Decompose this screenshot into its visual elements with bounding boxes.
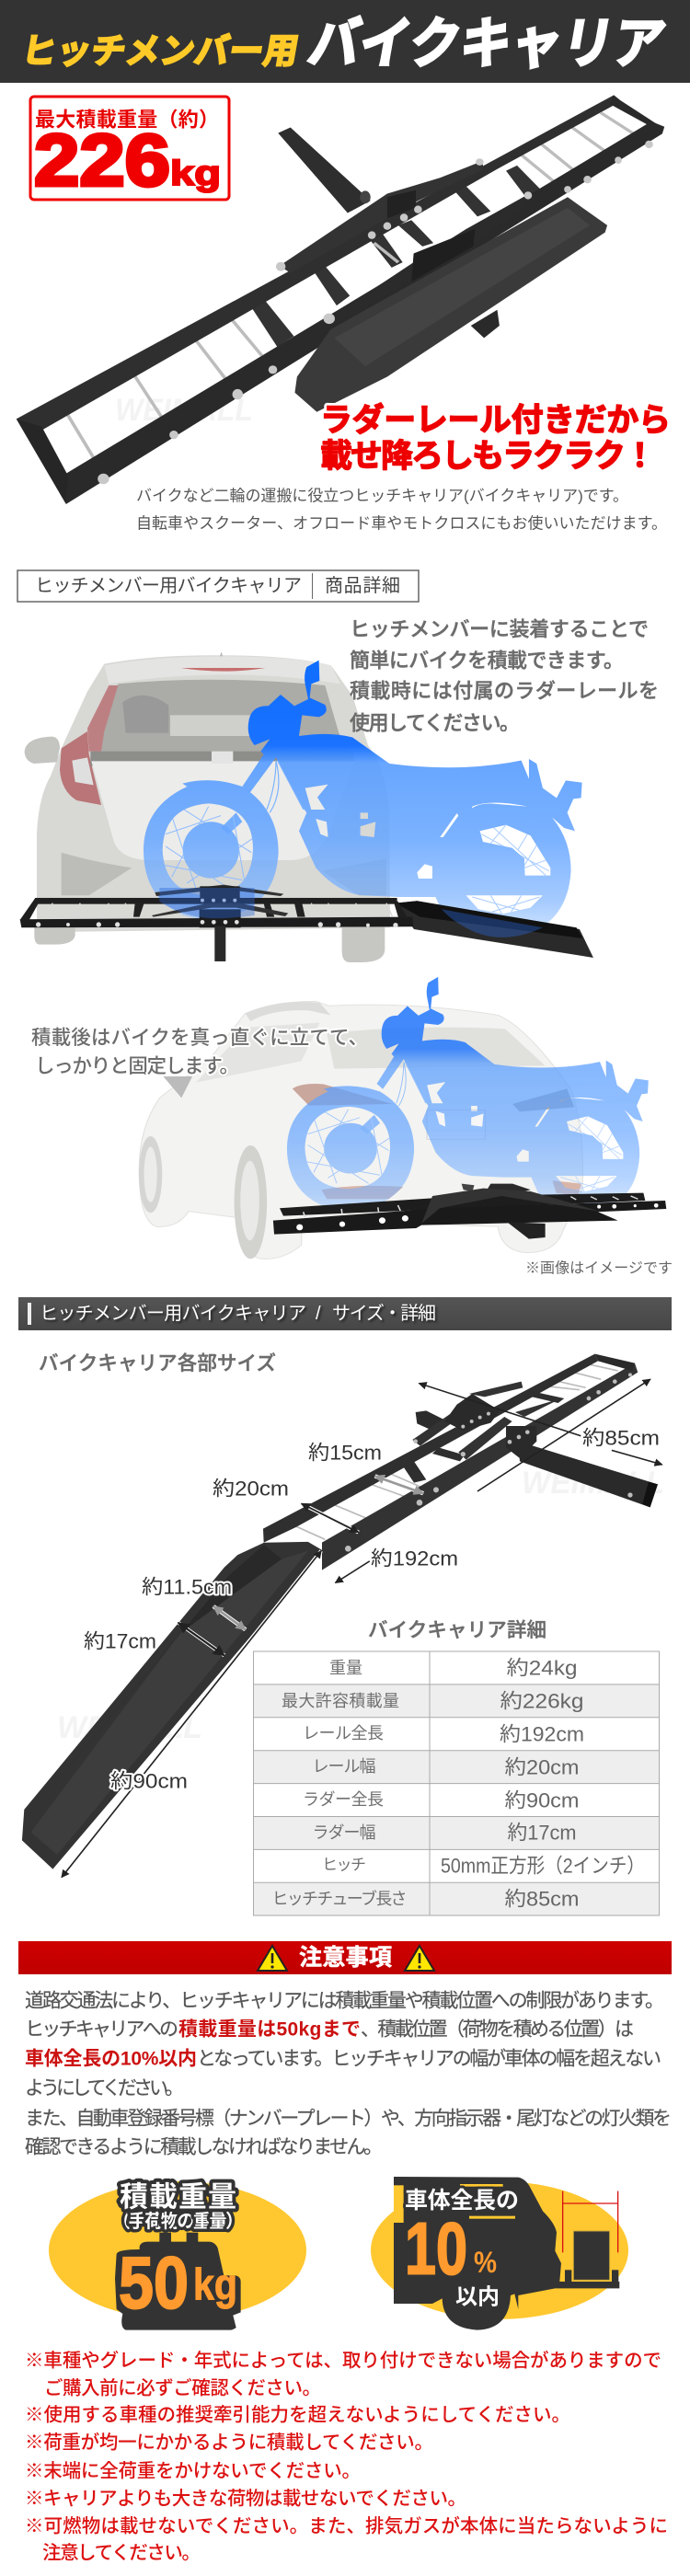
spec table: 50mm正方形（2インチ） <box>441 1855 645 1877</box>
red notes: ※荷重が均一にかかるように積載してください。 <box>25 2432 433 2453</box>
carrier on hatchback <box>20 885 593 961</box>
ramp <box>22 1542 324 1869</box>
spec table: 約24kg <box>506 1656 578 1680</box>
photo: wagon rear <box>139 1001 582 1259</box>
section heading: product details: ヒッチメンバー用バイクキャリア <box>35 575 302 596</box>
dimension labels: 約11.5cm <box>142 1575 232 1599</box>
image note: ※画像はイメージです <box>525 1260 673 1277</box>
motorcycle silhouette: loading <box>144 661 582 940</box>
graphic: load weight <box>49 2180 306 2330</box>
section heading: size details: ヒッチメンバー用バイクキャリア <box>40 1303 306 1324</box>
spec table: 約226kg <box>500 1689 583 1713</box>
spec table: ヒッチ <box>322 1857 366 1873</box>
watermarks: WEIMALL <box>522 1466 664 1501</box>
carrier on wagon <box>273 1184 666 1239</box>
spec table: 約192cm <box>500 1722 584 1746</box>
dimension arrows <box>62 1379 662 1878</box>
red callout: ラダーレール付きだから <box>320 401 671 438</box>
section heading: product details: 商品詳細 <box>325 575 400 596</box>
graphic: ten percent of vehicle length <box>371 2177 628 2330</box>
section heading: size details <box>18 1297 672 1330</box>
carrier dimension photo <box>22 1354 658 1869</box>
spec table: ラダー幅 <box>313 1823 375 1842</box>
red notes: 注意してください。 <box>42 2543 201 2563</box>
loading description <box>350 618 659 734</box>
subheading: part sizes: バイクキャリア各部サイズ <box>39 1352 276 1374</box>
spec table: レール幅 <box>313 1757 375 1776</box>
loading description: 簡単にバイクを積載できます。 <box>350 650 624 672</box>
graphic: ten percent of vehicle length: 以内 <box>455 2285 500 2309</box>
spec table: 約90cm <box>504 1788 580 1812</box>
spec table: 約85cm <box>504 1888 580 1910</box>
photo: hatchback rear <box>25 651 390 962</box>
red callout: 載せ降ろしもラクラク！ <box>320 438 656 475</box>
intro text <box>136 488 667 532</box>
caution paragraph: 、積載位置（荷物を積める位置）は <box>361 2018 634 2041</box>
spec table: 約20cm <box>504 1755 580 1779</box>
loading description: ヒッチメンバーに装着することで <box>350 618 649 640</box>
red notes: ※キャリアよりも大きな荷物は載せないでください。 <box>25 2488 466 2510</box>
dimension labels <box>84 1426 660 1792</box>
dimension labels: 約15cm <box>308 1441 382 1465</box>
spec table: 重量 <box>329 1659 362 1677</box>
spec table: ヒッチチューブ長さ <box>272 1889 407 1908</box>
red notes: ※可燃物は載せないでください。また、排気ガスが本体に当たらないように <box>25 2515 668 2537</box>
product image: carrier with ramp <box>17 95 664 504</box>
red callout: 載せ降ろしもラクラク！ <box>320 438 656 475</box>
watermarks: WEIMALL <box>57 1710 202 1745</box>
secured description <box>31 1027 368 1077</box>
section heading: size details: / <box>316 1304 321 1324</box>
caution banner: 注意事項 <box>299 1945 392 1971</box>
motorcycle silhouette: secured <box>287 977 649 1213</box>
dimension labels: 約20cm <box>213 1478 289 1500</box>
spec table: 最大許容積載量 <box>282 1692 399 1710</box>
graphic: ten percent of vehicle length: 10 <box>405 2208 467 2289</box>
badge: max load <box>30 97 229 201</box>
caution paragraph: となっています。ヒッチキャリアの幅が車体の幅を超えない <box>197 2048 661 2070</box>
title: hitch member: ヒッチメンバー用 <box>18 32 302 71</box>
graphic: load weight: 積載重量 <box>120 2180 236 2214</box>
graphic: ten percent of vehicle length: % <box>474 2246 497 2279</box>
subheading: carrier details: バイクキャリア詳細 <box>368 1619 546 1641</box>
red callout: ラダーレール付きだから <box>320 401 671 438</box>
intro text: 自転車やスクーター、オフロード車やモトクロスにもお使いいただけます。 <box>136 513 667 532</box>
caution paragraph: 車体全長の10%以内 <box>25 2048 197 2070</box>
badge unit: kg <box>170 155 221 193</box>
graphic: ten percent of vehicle length: 車体全長の <box>405 2188 519 2214</box>
red notes: ご購入前に必ずご確認ください。 <box>44 2377 321 2399</box>
loading description: 積載時には付属のラダーレールを <box>350 679 659 703</box>
spec table: 約17cm <box>508 1822 576 1844</box>
dimension labels: 約192cm <box>371 1547 458 1570</box>
spec table: レール全長 <box>303 1724 384 1742</box>
caution paragraph <box>25 1991 672 2158</box>
rail and hitch <box>263 1354 658 1570</box>
caution paragraph: ようにしてください。 <box>25 2077 184 2099</box>
graphic: load weight: kg <box>193 2261 237 2309</box>
red notes: ※使用する車種の推奨牽引能力を超えないようにしてください。 <box>25 2405 570 2425</box>
loading description: 使用してください。 <box>350 712 520 734</box>
watermarks <box>57 1466 664 1745</box>
red notes <box>25 2350 668 2563</box>
header band <box>0 0 690 83</box>
intro text: バイクなど二輪の運搬に役立つヒッチキャリア(バイクキャリア)です。 <box>136 488 628 504</box>
graphic: load weight: 50 <box>119 2241 189 2324</box>
section heading: size details: サイズ・詳細 <box>332 1303 436 1324</box>
caution paragraph: また、自動車登録番号標（ナンバープレート）や、方向指示器・尾灯などの灯火類を <box>25 2109 672 2129</box>
icon: warning right <box>405 1946 434 1971</box>
red callout <box>320 401 671 475</box>
red notes: ※末端に全荷重をかけないでください。 <box>25 2460 361 2482</box>
badge label: 最大積載重量（約） <box>35 109 219 131</box>
dimension labels: 約17cm <box>84 1630 156 1652</box>
caution paragraph: 道路交通法により、ヒッチキャリアには積載重量や積載位置への制限があります。 <box>25 1991 664 2011</box>
caution paragraph: 積載重量は50kgまで <box>178 2018 361 2041</box>
dimension labels: 約90cm <box>110 1770 188 1792</box>
watermark: WEIMALL <box>115 393 253 428</box>
caution paragraph: 確認できるように積載しなければなりません。 <box>25 2136 383 2158</box>
section heading: product details <box>17 570 419 602</box>
graphic: load weight: （手荷物の重量） <box>112 2211 244 2232</box>
dimension labels: 約85cm <box>582 1426 660 1450</box>
caution paragraph: ヒッチキャリアへの <box>25 2018 178 2041</box>
title: bike carrier: バイクキャリア <box>304 12 670 75</box>
badge value: 226 <box>34 120 170 201</box>
spec table: ラダー全長 <box>303 1790 384 1809</box>
spec table <box>254 1651 659 1915</box>
secured description: しっかりと固定します。 <box>35 1055 239 1077</box>
red notes: ※車種やグレード・年式によっては、取り付けできない場合がありますので <box>25 2350 661 2372</box>
caution banner <box>18 1941 672 1974</box>
secured description: 積載後はバイクを真っ直ぐに立てて、 <box>31 1027 368 1049</box>
icon: warning left <box>258 1946 287 1971</box>
